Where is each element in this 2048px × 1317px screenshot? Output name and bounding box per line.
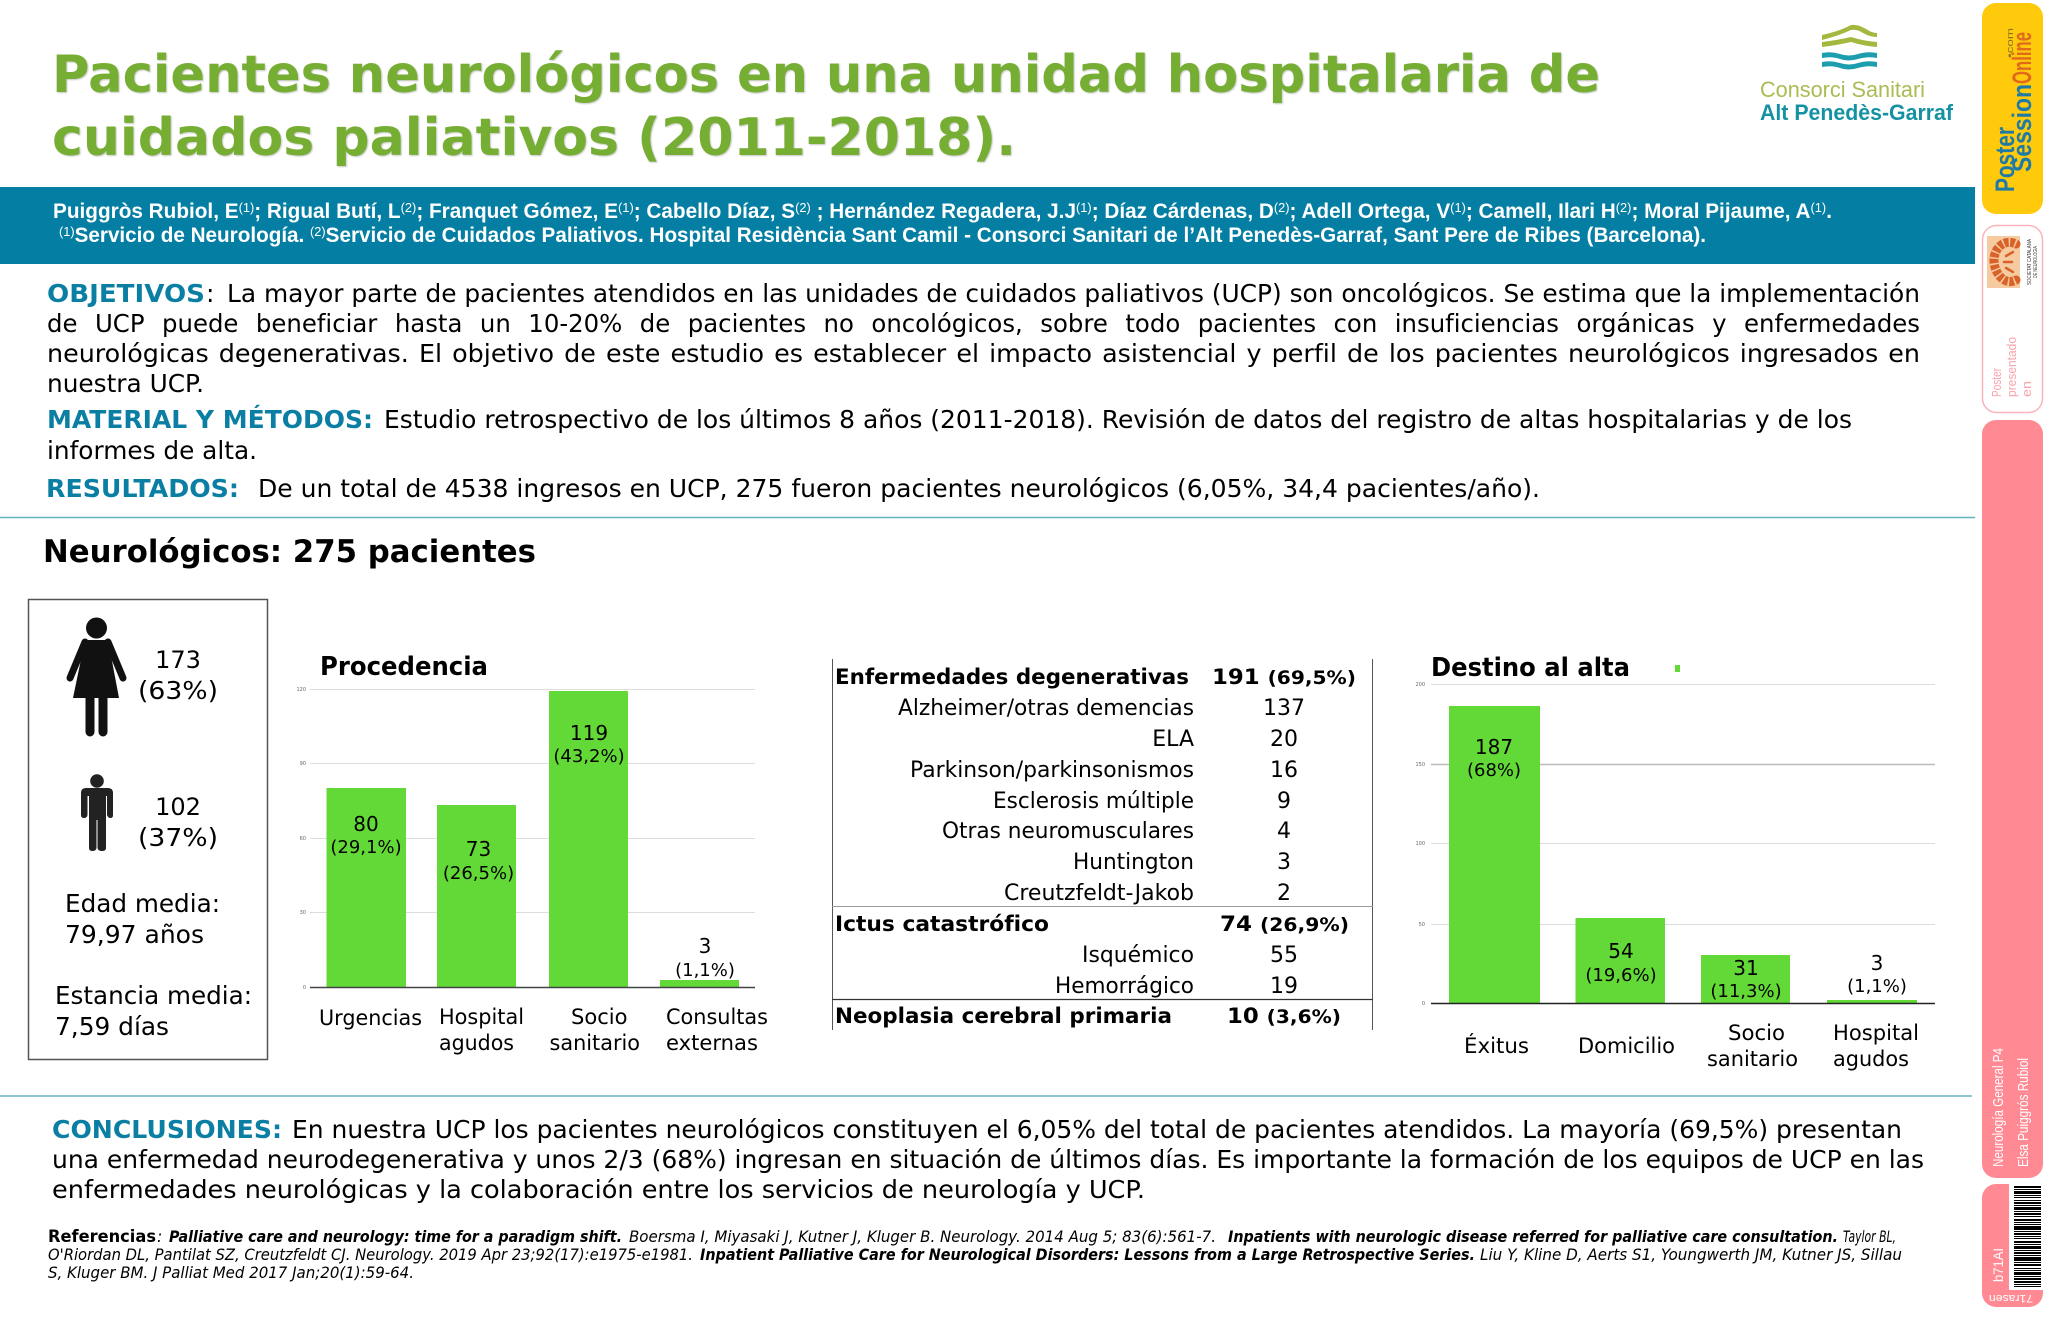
panel: demographics: (37%) — [138, 823, 218, 852]
sidebar: Poster Session Online badge: Online — [2007, 32, 2037, 84]
chart: Destino al alta: Hospital — [1833, 1021, 1919, 1045]
sidebar: poster presented at: presentado — [2005, 337, 2019, 397]
references: Boersma I, Miyasaki J, Kutner J, Kluger B. Neurology. 2014 Aug 5; 83(6):561-7. — [629, 1227, 1216, 1246]
chart: Destino al alta: 0 — [1422, 1001, 1425, 1007]
icon: brain society logo: SOCIETAT CATALANA — [2027, 238, 2033, 285]
table: diagnoses: Alzheimer/otras demencias — [898, 696, 1194, 721]
table: diagnoses — [832, 659, 1373, 1030]
authors band: (1) — [239, 200, 254, 215]
sidebar: poster presented at: Poster — [1990, 368, 2004, 397]
panel: demographics: 102 — [155, 793, 201, 821]
chart: Procedencia: Socio — [571, 1005, 628, 1029]
logo: Consorci Sanitari Alt Penedès-Garraf: Alt Penedès-Garraf — [1760, 100, 1954, 125]
heading: Neurológicos: Neurológicos: 275 pacientes — [43, 534, 536, 570]
panel: demographics: Estancia media: — [55, 981, 252, 1010]
chart: Destino al alta — [1415, 653, 1935, 1071]
table: diagnoses: 137 — [1263, 696, 1305, 721]
table: diagnoses: 16 — [1270, 758, 1298, 783]
authors band: ; Adell Ortega, V — [1290, 200, 1450, 223]
text block: material y métodos: MATERIAL Y MÉTODOS: — [47, 405, 373, 434]
table: diagnoses: Esclerosis múltiple — [993, 789, 1194, 814]
authors band: (2) — [1616, 200, 1631, 215]
authors band: ; Hernández Regadera, J.J — [811, 200, 1076, 223]
text block: objetivos: OBJETIVOS — [47, 279, 205, 308]
authors band: (1) — [1076, 200, 1092, 215]
text block: conclusiones — [52, 1115, 1924, 1204]
text block: objetivos: de UCP puede beneficiar hasta un 10-20% de pacientes no oncológicos, sobre todo pacientes con insuficiencias orgánicas y enfermedades — [47, 309, 1920, 338]
chart: Procedencia: Consultas — [666, 1005, 768, 1029]
authors band: (2) — [401, 200, 416, 215]
panel: demographics: 79,97 años — [65, 920, 204, 949]
text block: conclusiones: CONCLUSIONES: — [52, 1115, 282, 1144]
panel: demographics: Edad media: — [65, 889, 220, 918]
chart: Procedencia: sanitario — [550, 1031, 640, 1055]
sidebar: Poster Session Online badge: Poster — [1990, 127, 2020, 192]
chart: Procedencia: (1,1%) — [675, 960, 735, 981]
chart: Procedencia: 0 — [303, 985, 306, 991]
text block: objetivos — [47, 279, 1920, 398]
authors band: ; Cabello Díaz, S — [634, 200, 795, 223]
text block: resultados: De un total de 4538 ingresos en UCP, 275 fueron pacientes neurológicos (6,05%, 34,4 pacientes/año). — [258, 474, 1540, 503]
authors band: ; Franquet Gómez, E — [416, 200, 618, 223]
references: Liu Y, Kline D, Aerts S1, Youngwerth JM, Kutner JS, Sillau — [1480, 1245, 1902, 1264]
logo: Consorci Sanitari Alt Penedès-Garraf — [1760, 25, 1954, 125]
table: diagnoses: 10 (3,6%) — [1227, 1004, 1341, 1029]
chart: Destino al alta: (11,3%) — [1710, 981, 1782, 1002]
sidebar: barcode: 71rasen — [1989, 1292, 2033, 1304]
chart: Procedencia: agudos — [439, 1031, 514, 1055]
table: diagnoses: 191 (69,5%) — [1212, 665, 1356, 690]
sidebar: barcode — [1982, 1184, 2048, 1307]
table: diagnoses: 3 — [1277, 850, 1291, 875]
text block: resultados: RESULTADOS: — [46, 474, 239, 503]
text block: material y métodos: informes de alta. — [47, 436, 257, 465]
table: diagnoses: 2 — [1277, 881, 1291, 906]
chart: Procedencia: (29,1%) — [330, 837, 402, 858]
sidebar: session label: Neurología General P4 — [1990, 1048, 2007, 1167]
chart: Procedencia: 119 — [570, 721, 608, 745]
chart: Destino al alta: 54 — [1608, 939, 1634, 963]
table: diagnoses: Isquémico — [1082, 943, 1194, 968]
chart: Destino al alta: Éxitus — [1464, 1033, 1529, 1058]
chart: Destino al alta: 3 — [1871, 951, 1883, 975]
chart: Destino al alta: Socio — [1728, 1021, 1785, 1045]
references: Taylor BL, — [1843, 1227, 1896, 1246]
references: Referencias — [48, 1227, 156, 1247]
table: diagnoses: Neoplasia cerebral primaria — [835, 1004, 1172, 1029]
panel: demographics: 173 — [155, 646, 201, 674]
panel: demographics: 7,59 días — [55, 1012, 169, 1041]
chart: Procedencia: 90 — [300, 761, 306, 767]
chart: Destino al alta: (1,1%) — [1847, 976, 1907, 997]
chart: Destino al alta: 187 — [1475, 735, 1513, 759]
table: diagnoses: 74 (26,9%) — [1220, 912, 1349, 937]
authors band: (1) — [59, 224, 75, 239]
references: Palliative care and neurology: time for a paradigm shift. — [169, 1227, 622, 1246]
chart: Destino al alta: 31 — [1733, 956, 1759, 980]
chart: Destino al alta: 200 — [1415, 682, 1425, 688]
panel: demographics — [28, 600, 268, 1060]
authors band: ; Camell, Ilari H — [1466, 200, 1616, 223]
table: diagnoses: 19 — [1270, 974, 1298, 999]
chart: Procedencia: 3 — [699, 934, 711, 958]
text block: objetivos: nuestra UCP. — [47, 369, 204, 398]
authors band: (2) — [795, 200, 811, 215]
authors band: Servicio de Neurología. — [75, 224, 310, 247]
chart: Procedencia: 30 — [300, 910, 306, 916]
chart: Procedencia: (26,5%) — [443, 863, 514, 884]
table: diagnoses: Enfermedades degenerativas — [835, 665, 1189, 690]
table: diagnoses: ELA — [1152, 727, 1194, 752]
authors band: Puiggròs Rubiol, E — [53, 200, 241, 223]
chart: Procedencia: 73 — [466, 837, 491, 861]
sidebar: poster presented at: en — [2020, 381, 2034, 397]
table: diagnoses: 9 — [1277, 789, 1291, 814]
references — [48, 1227, 1902, 1282]
sidebar: Poster Session Online badge: •com — [2005, 28, 2015, 58]
chart: Destino al alta: (68%) — [1467, 760, 1521, 781]
sidebar: session label: Elsa Puiggrós Rubiol — [2015, 1058, 2032, 1167]
references: : — [157, 1227, 162, 1246]
text block: objetivos: neurológicas degenerativas. El objetivo de este estudio es establecer el impacto asistencial y perfil de los pacientes neurológicos ingresados en — [47, 339, 1920, 368]
chart: Destino al alta: 50 — [1419, 922, 1425, 928]
table: diagnoses: Creutzfeldt-Jakob — [1004, 881, 1194, 906]
authors band: (2) — [1274, 200, 1290, 215]
sidebar: Poster Session Online badge — [1982, 3, 2043, 214]
chart: Procedencia: Urgencias — [319, 1006, 422, 1030]
table: diagnoses: Hemorrágico — [1055, 974, 1194, 999]
chart: Destino al alta: 150 — [1415, 762, 1425, 768]
panel: demographics: (63%) — [138, 676, 218, 705]
chart: Procedencia: 80 — [353, 812, 379, 836]
table: diagnoses: Parkinson/parkinsonismos — [910, 758, 1194, 783]
title — [52, 45, 1600, 168]
table: diagnoses: Ictus catastrófico — [835, 912, 1049, 937]
chart: Destino al alta: agudos — [1833, 1047, 1909, 1071]
authors band — [0, 187, 1975, 264]
authors band: (1) — [618, 200, 634, 215]
chart: Procedencia: 120 — [296, 687, 306, 693]
table: diagnoses: Huntington — [1073, 850, 1194, 875]
authors band: ; Díaz Cárdenas, D — [1092, 200, 1274, 223]
authors band: (2) — [310, 224, 326, 239]
chart: Destino al alta: Domicilio — [1578, 1034, 1675, 1058]
sidebar: session label — [1982, 420, 2043, 1178]
chart: Procedencia — [296, 652, 768, 1055]
chart: Destino al alta: sanitario — [1707, 1047, 1798, 1071]
chart: Procedencia: (43,2%) — [553, 746, 625, 767]
authors band: (1) — [1450, 200, 1466, 215]
icon: woman — [70, 618, 123, 732]
logo: Consorci Sanitari Alt Penedès-Garraf: Consorci Sanitari — [1760, 77, 1925, 102]
text block: conclusiones: enfermedades neurológicas y la colaboración entre los servicios de neurología y UCP. — [52, 1175, 1145, 1204]
text block: objetivos: La mayor parte de pacientes atendidos en las unidades de cuidados paliativos (UCP) son oncológicos. Se estima que la implementación — [227, 279, 1920, 308]
references: S, Kluger BM. J Palliat Med 2017 Jan;20(1):59-64. — [48, 1263, 414, 1282]
authors band: . — [1826, 200, 1832, 223]
text block: material y métodos — [47, 405, 1852, 465]
references: Inpatients with neurologic disease referred for palliative care consultation. — [1228, 1227, 1838, 1246]
sidebar: Poster Session Online badge: Session — [2007, 84, 2037, 172]
table: diagnoses: 55 — [1270, 943, 1298, 968]
icon: man — [81, 774, 113, 851]
title: cuidados paliativos (2011-2018). — [52, 108, 1016, 168]
references: O'Riordan DL, Pantilat SZ, Creutzfeldt CJ. Neurology. 2019 Apr 23;92(17):e1975-e1981. — [48, 1245, 693, 1264]
sidebar: poster presented at — [1982, 226, 2042, 412]
authors band: ; Rigual Butí, L — [254, 200, 401, 223]
references: Inpatient Palliative Care for Neurological Disorders: Lessons from a Large Retrospective Series. — [700, 1245, 1475, 1264]
icon: brain society logo — [1987, 236, 2039, 288]
text block: conclusiones: En nuestra UCP los pacientes neurológicos constituyen el 6,05% del total de pacientes atendidos. La mayoría (69,5%) presentan — [292, 1115, 1902, 1144]
chart: Procedencia: Hospital — [439, 1005, 524, 1029]
authors band: (1) — [1811, 200, 1826, 215]
chart: Destino al alta: (19,6%) — [1585, 965, 1657, 986]
sidebar: barcode: b71AI — [1990, 1248, 2006, 1282]
text block: objetivos: : — [206, 279, 214, 308]
chart: Procedencia: externas — [666, 1031, 758, 1055]
heading: Destino al alta: Destino al alta — [1431, 653, 1630, 683]
table: diagnoses: 4 — [1277, 819, 1291, 844]
icon: brain society logo: DE NEUROLOGIA — [2033, 245, 2039, 278]
table: diagnoses: 20 — [1270, 727, 1298, 752]
table: diagnoses: Otras neuromusculares — [942, 819, 1194, 844]
chart: Destino al alta: 100 — [1415, 841, 1425, 847]
text block: material y métodos: Estudio retrospectivo de los últimos 8 años (2011-2018). Revisión de datos del registro de altas hospitalarias y de los — [384, 405, 1852, 434]
authors band: Servicio de Cuidados Paliativos. Hospital Residència Sant Camil - Consorci Sanitari de l’Alt Penedès-Garraf, Sant Pere de Ribes (Barcelona). — [326, 224, 1706, 247]
title: Pacientes neurológicos en una unidad hospitalaria de — [52, 45, 1600, 105]
authors band: ; Moral Pijaume, A — [1631, 200, 1811, 223]
text block: conclusiones: una enfermedad neurodegenerativa y unos 2/3 (68%) ingresan en situación de últimos días. Es importante la formación de los equipos de UCP en las — [52, 1145, 1924, 1174]
chart: Procedencia: 60 — [300, 836, 306, 842]
heading: Procedencia: Procedencia — [320, 652, 488, 682]
